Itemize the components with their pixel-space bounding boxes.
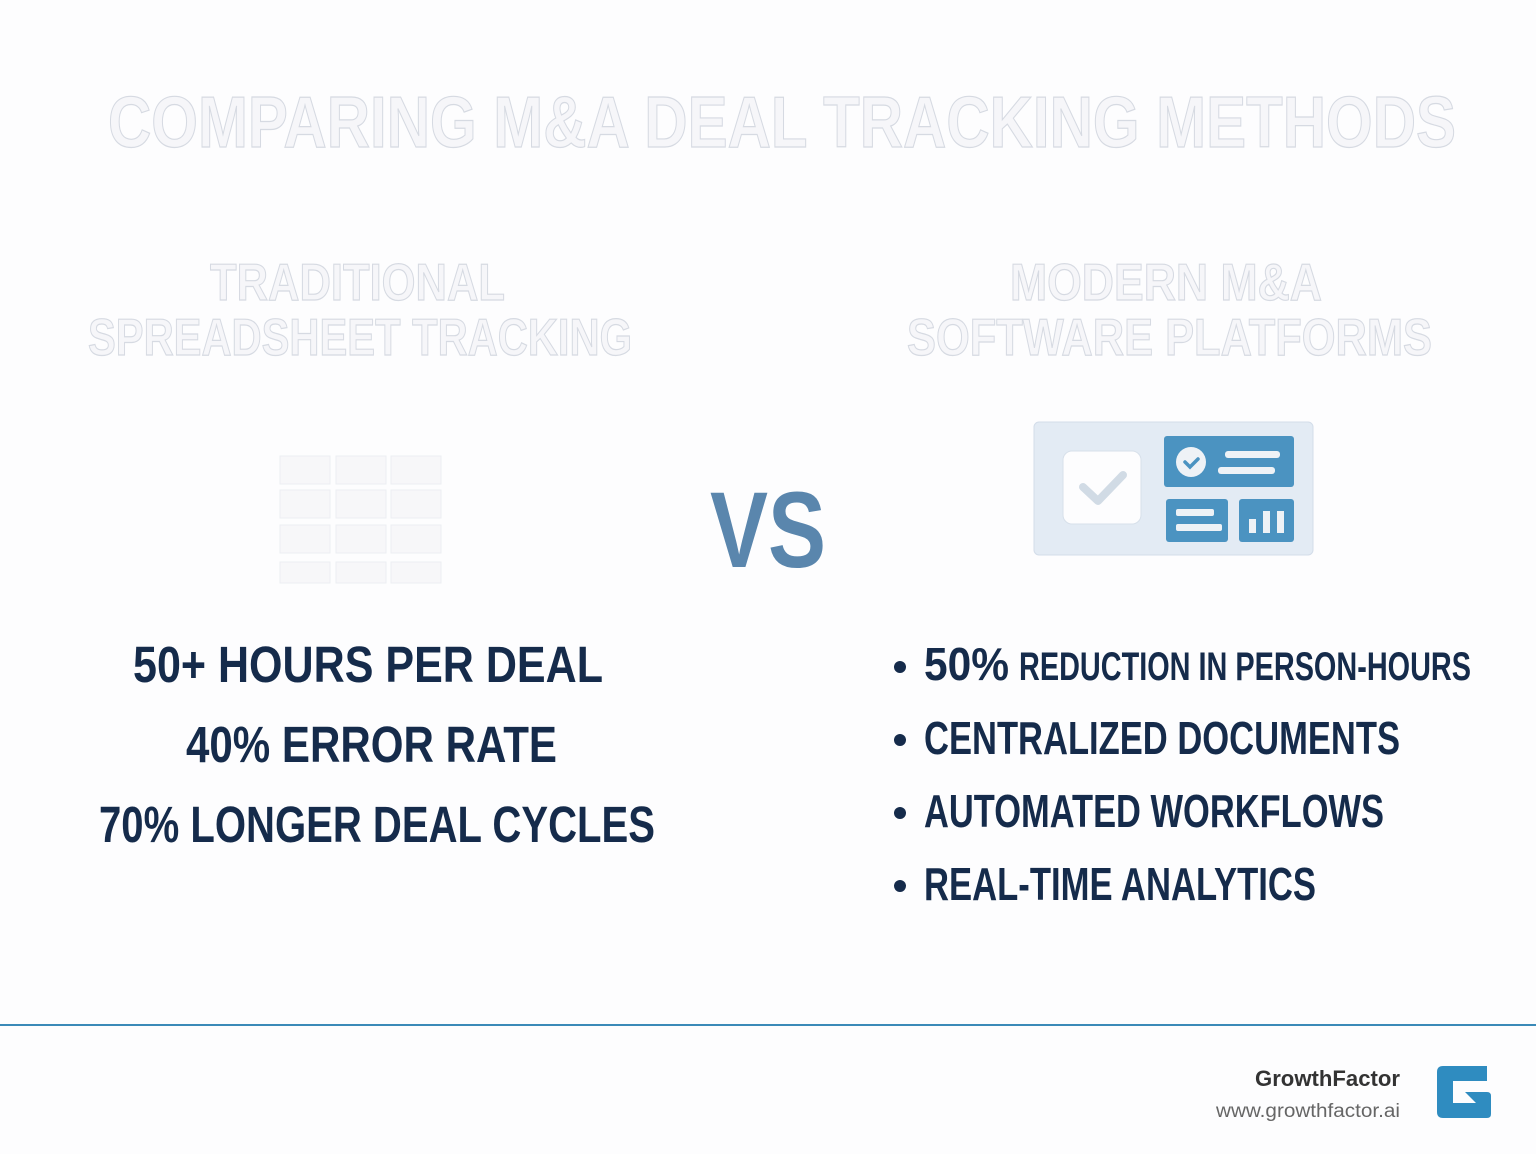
list: modern benefits	[894, 638, 1471, 910]
heading: traditional: TRADITIONAL	[210, 254, 505, 312]
icon: software dashboard	[1034, 422, 1313, 555]
list: modern benefits: REAL-TIME ANALYTICS	[924, 858, 1316, 910]
heading: traditional: SPREADSHEET TRACKING	[88, 309, 632, 367]
heading: modern	[907, 254, 1432, 367]
stats: traditional: 50+ HOURS PER DEAL	[133, 636, 603, 693]
footer brand: www.growthfactor.ai	[1215, 1101, 1400, 1122]
stats: traditional: 70% LONGER DEAL CYCLES	[99, 796, 655, 853]
heading: traditional	[88, 254, 632, 367]
stats: traditional	[99, 636, 655, 853]
icon: growthfactor logo	[1437, 1066, 1491, 1118]
list: modern benefits: AUTOMATED WORKFLOWS	[924, 785, 1384, 837]
heading: modern: MODERN M&A	[1010, 254, 1322, 312]
footer brand: GrowthFactor	[1255, 1066, 1400, 1091]
icon: spreadsheet grid	[280, 456, 441, 583]
heading: modern: SOFTWARE PLATFORMS	[907, 309, 1432, 367]
footer brand	[1215, 1066, 1400, 1122]
vs label: VS	[710, 469, 826, 590]
list: modern benefits: 50%	[924, 638, 1009, 690]
stats: traditional: 40% ERROR RATE	[186, 716, 557, 773]
